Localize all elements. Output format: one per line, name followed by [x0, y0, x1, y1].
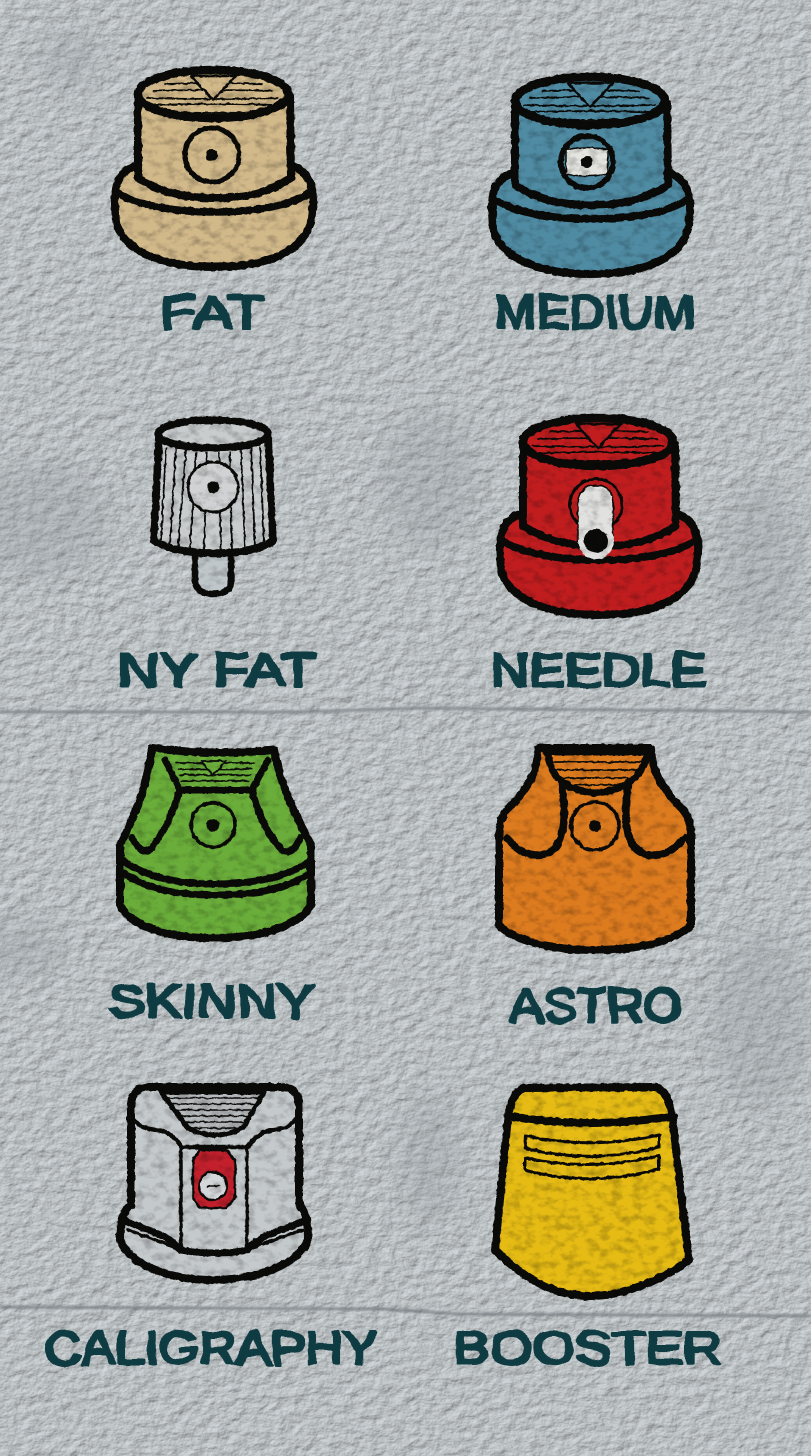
label: FAT: FAT	[160, 286, 265, 338]
icon: booster cap	[495, 1087, 689, 1296]
panel: Booster cap	[453, 1087, 722, 1374]
icon: needle cap	[500, 418, 698, 615]
icon: astro cap	[499, 748, 691, 950]
panel: Fat cap	[115, 70, 313, 338]
panel: Needle cap	[490, 418, 707, 696]
label: NEEDLE: NEEDLE	[490, 644, 707, 696]
panel: Caligraphy cap	[44, 1087, 377, 1374]
label: NY FAT: NY FAT	[117, 644, 316, 696]
panel: Astro cap	[499, 748, 691, 1032]
icon: medium cap	[492, 77, 690, 274]
icon: fat cap	[115, 70, 313, 267]
panel: NY Fat cap	[117, 420, 316, 696]
panel: Skinny cap	[108, 748, 314, 1027]
label: CALIGRAPHY: CALIGRAPHY	[44, 1322, 377, 1374]
label: SKINNY: SKINNY	[108, 975, 314, 1027]
icon: caligraphy cap	[120, 1087, 308, 1280]
label: MEDIUM: MEDIUM	[495, 286, 695, 338]
label: ASTRO: ASTRO	[510, 980, 682, 1032]
icon: NY fat cap	[154, 420, 273, 594]
panel: Medium cap	[492, 77, 695, 338]
icon: skinny cap	[120, 748, 311, 938]
label: BOOSTER: BOOSTER	[453, 1322, 722, 1374]
